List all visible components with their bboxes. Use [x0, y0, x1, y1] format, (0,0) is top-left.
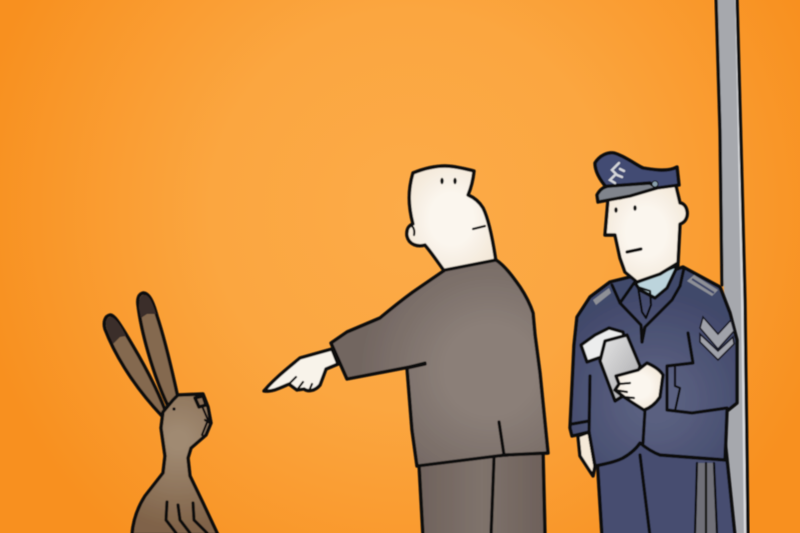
jacket: [331, 260, 548, 466]
man in suit: [264, 166, 548, 533]
finger lines: [289, 377, 312, 391]
notebook: [600, 335, 640, 401]
rank chevrons: [700, 317, 734, 360]
policeman: [570, 153, 737, 533]
shirt and tie: [635, 265, 678, 318]
mouth: [627, 249, 641, 252]
head: [407, 166, 496, 272]
hare nose and mouth: [195, 396, 210, 435]
trousers: [419, 452, 545, 533]
hare: [104, 293, 218, 533]
trousers: [596, 440, 735, 533]
hare front legs: [166, 502, 207, 533]
hare eye: [172, 407, 176, 411]
hand holding notebook: [615, 363, 663, 410]
eyes: [440, 178, 444, 184]
head: [605, 182, 687, 282]
notebook paper: [581, 328, 626, 362]
peaked cap: [595, 153, 679, 202]
epaulettes: [593, 275, 718, 305]
hare body and head: [132, 394, 218, 533]
lapels: [612, 268, 684, 342]
lamp post: [716, 0, 748, 533]
eyes: [614, 207, 618, 213]
uniform jacket: [570, 267, 737, 466]
hare rear ear: [104, 315, 165, 416]
hare front ear: [138, 293, 178, 406]
cap badge: [610, 163, 624, 183]
mouth: [473, 226, 485, 229]
left hand: [578, 432, 595, 476]
pointing hand: [264, 349, 338, 391]
